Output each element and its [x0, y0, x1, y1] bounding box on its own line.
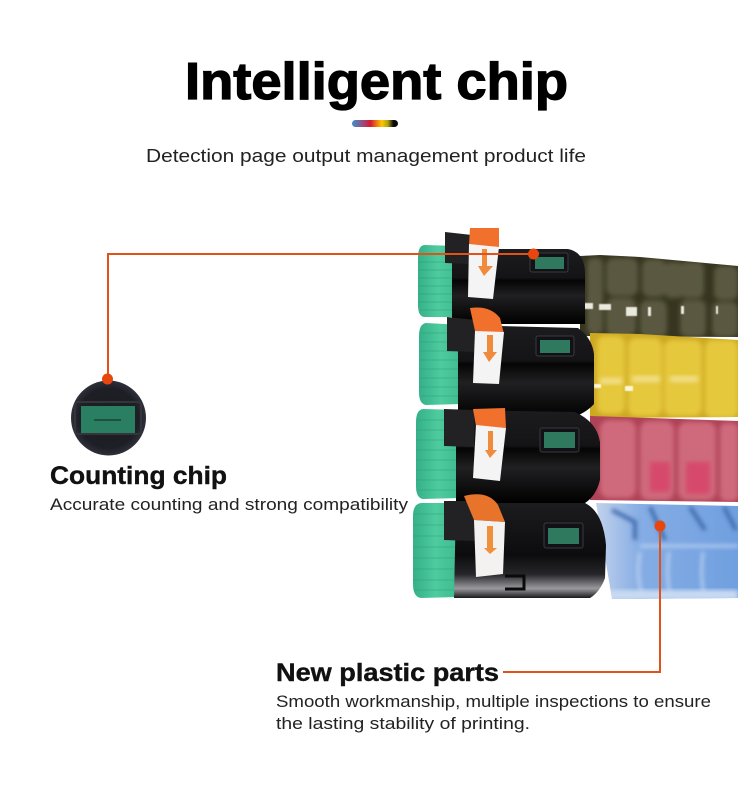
bottle [580, 255, 738, 337]
cap [447, 317, 476, 352]
green gear [416, 409, 460, 499]
subtitle: Detection page output management product life [146, 145, 586, 166]
orange tab and white label [470, 307, 504, 334]
bottle [590, 415, 740, 505]
green gear [418, 245, 458, 317]
cap [444, 501, 476, 541]
title: Intelligent chip [185, 53, 568, 111]
bottle [590, 330, 740, 420]
cap [444, 409, 474, 447]
chip window [536, 336, 574, 356]
chip window [530, 253, 568, 272]
text: plastic parts description [276, 693, 711, 733]
black body [452, 249, 585, 324]
icon: counting chip close-up [71, 374, 146, 456]
connector line: plastic parts [503, 520, 666, 672]
cap [445, 232, 472, 264]
black body [456, 410, 600, 503]
cartridge: black [418, 228, 740, 340]
text: plastic parts description: the lasting stability of printing. [276, 715, 530, 733]
green gear [419, 323, 462, 405]
bottle [596, 500, 741, 600]
product photo: four toner cartridges [413, 228, 741, 600]
orange tab and white label [464, 494, 505, 522]
chip window [544, 523, 583, 548]
black and silver body [454, 503, 606, 598]
notch [505, 576, 524, 589]
cartridge: yellow [419, 307, 740, 420]
colour accent bar [352, 120, 398, 127]
text: counting chip description: Accurate counting and strong compatibility [50, 496, 409, 514]
orange tab and white label [469, 228, 499, 247]
green gear [413, 503, 458, 598]
cartridge: red [416, 408, 740, 505]
chip window [540, 428, 579, 452]
cartridge: blue [413, 494, 741, 600]
connector line: counting chip [108, 248, 539, 379]
black body [458, 325, 594, 418]
heading: counting chip: Counting chip [50, 462, 227, 490]
text: plastic parts description: Smooth workmanship, multiple inspections to ensure [276, 693, 711, 711]
heading: new plastic parts: New plastic parts [276, 659, 499, 687]
orange tab and white label [473, 408, 506, 428]
